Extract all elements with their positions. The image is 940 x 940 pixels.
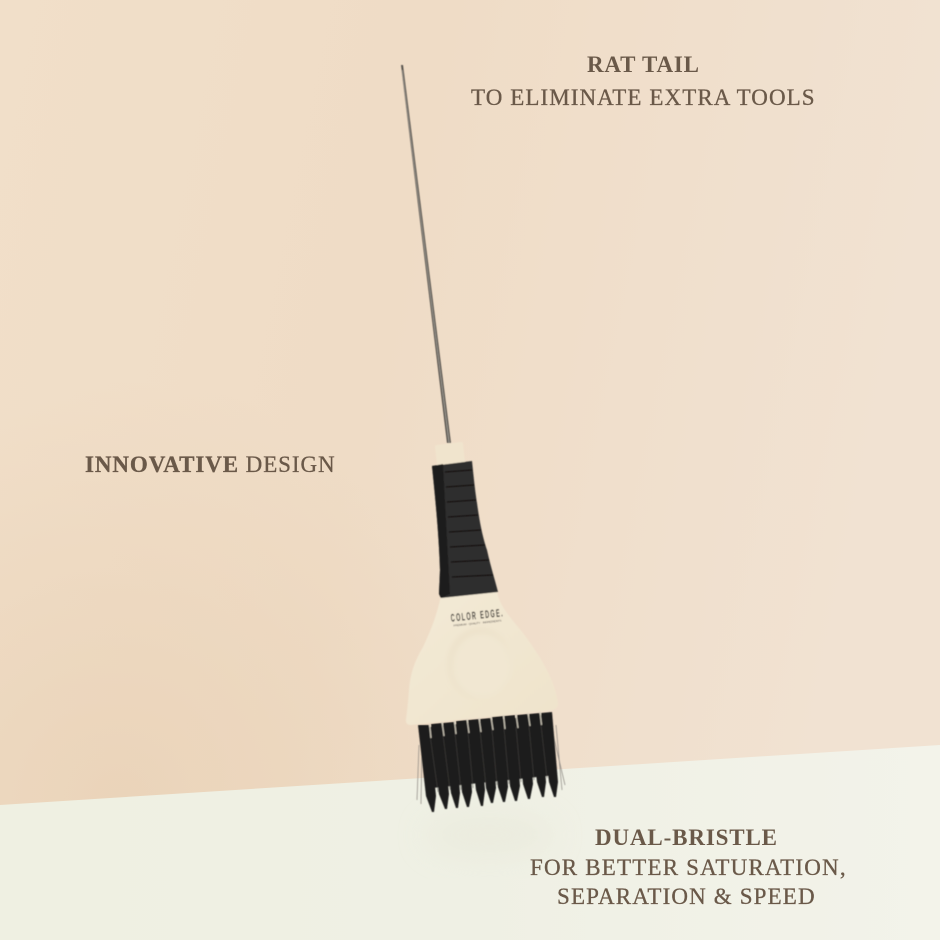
heading: dual-bristle: DUAL-BRISTLE xyxy=(595,825,777,850)
bristle tufts xyxy=(418,712,558,812)
rat tail needle xyxy=(401,65,451,443)
subheading: better saturation: FOR BETTER SATURATION, xyxy=(530,855,846,880)
brush product illustration xyxy=(401,65,565,812)
fine outer bristles xyxy=(417,725,565,804)
logo: Color Edge: PREMIUM · QUALITY · INGREDIENTS xyxy=(453,618,502,627)
dual bristles xyxy=(417,712,565,812)
callout: innovative design: INNOVATIVE DESIGN xyxy=(85,452,335,477)
floor surface xyxy=(0,745,940,940)
brush reflection on floor xyxy=(425,811,555,859)
callout: dual bristle xyxy=(530,825,846,909)
callout: rat tail xyxy=(471,52,815,110)
bristle separators xyxy=(430,725,547,792)
grip ridges xyxy=(445,470,493,577)
wall shade toward lower left xyxy=(0,380,560,820)
heading: rat tail: RAT TAIL xyxy=(587,52,699,77)
subheading: eliminate extra tools: TO ELIMINATE EXTRA TOOLS xyxy=(471,85,815,110)
bristle backing xyxy=(420,714,556,788)
subheading: separation and speed: SEPARATION & SPEED xyxy=(557,884,815,909)
thumb dimple on head xyxy=(443,624,515,702)
logo: Color Edge: COLOR EDGE. xyxy=(450,606,503,624)
cream brush head xyxy=(406,592,558,725)
cream collar tab xyxy=(435,442,465,465)
bristle gaps xyxy=(430,712,542,738)
black rubber grip xyxy=(432,461,498,598)
